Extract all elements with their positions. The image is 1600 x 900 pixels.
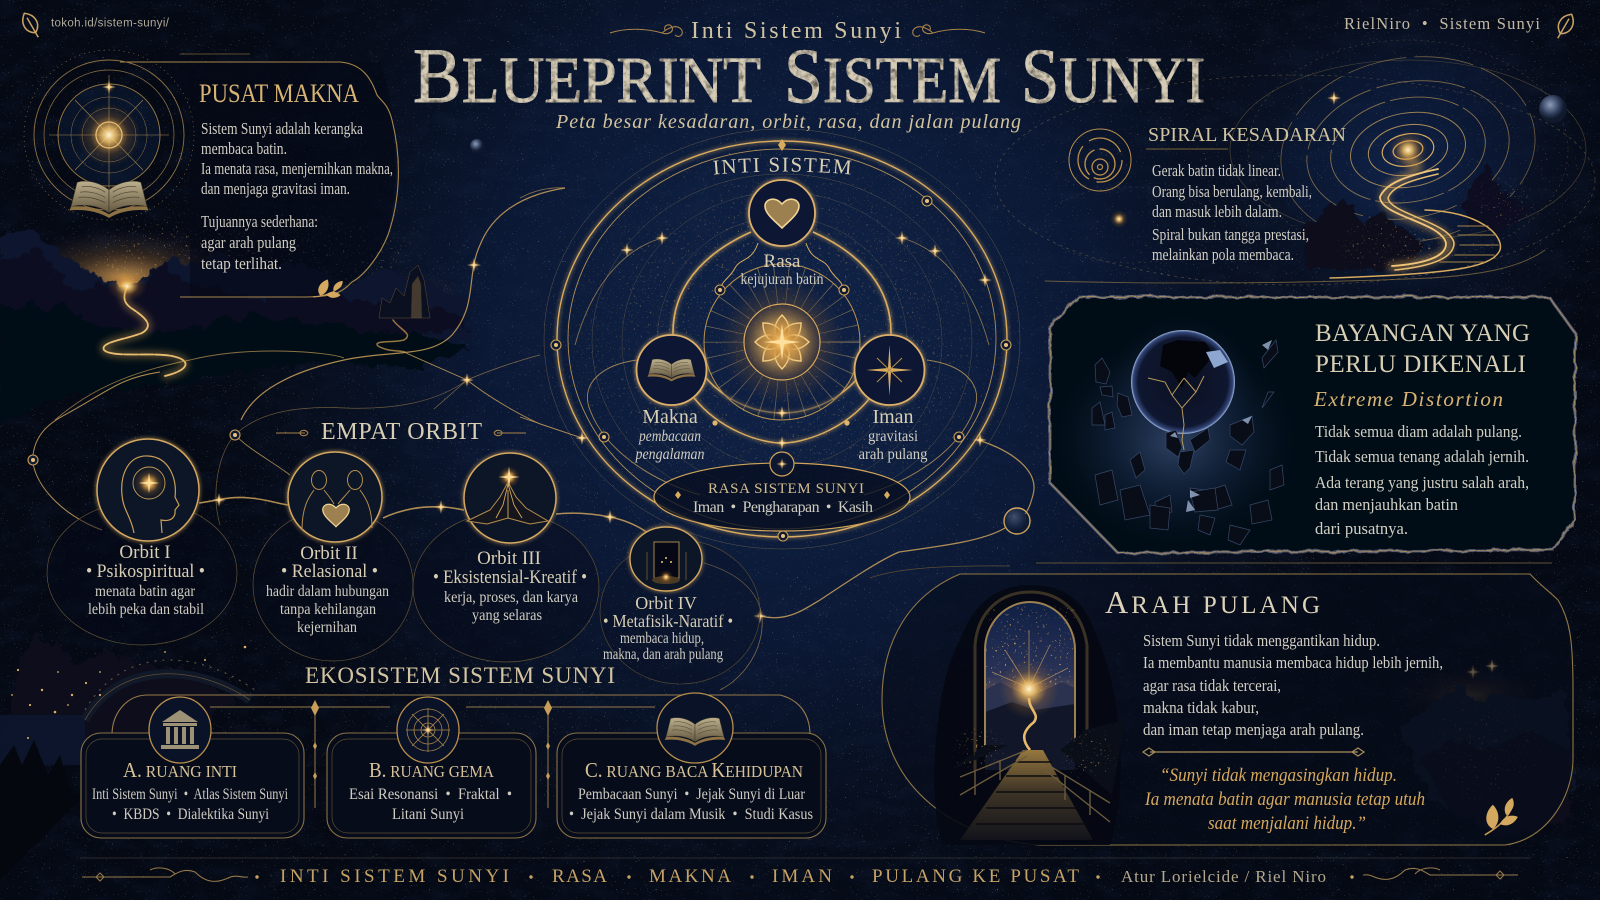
- heading: BAYANGAN YANG: [1315, 320, 1530, 347]
- orbit IV: Orbit IV: [635, 593, 697, 613]
- body text: agar rasa tidak tercerai,: [1143, 676, 1281, 695]
- quote: [1144, 765, 1425, 834]
- header: [19, 10, 1577, 133]
- orbit IV: membaca hidup,: [620, 630, 704, 647]
- footer keywords: RASA: [552, 866, 607, 887]
- icon: open book: [657, 693, 733, 763]
- eyebrow: Inti Sistem Sunyi: [691, 18, 901, 44]
- node: rasa: [740, 180, 824, 288]
- icon: laurel: [1482, 793, 1522, 842]
- body text: Ada terang yang justru salah arah,: [1315, 473, 1529, 492]
- title: [413, 32, 1205, 119]
- callout: rasa sistem sunyi: [654, 452, 910, 531]
- orbit I: lebih peka dan stabil: [88, 601, 204, 618]
- card B: ruang gema: B. RUANG GEMA: [369, 758, 495, 782]
- subtitle: Peta besar kesadaran, orbit, rasa, dan jalan pulang: [555, 111, 1021, 133]
- shattered sphere scene: [1053, 315, 1297, 545]
- node: makna: Makna: [642, 406, 698, 428]
- orbit IV: makna, dan arah pulang: [603, 646, 723, 663]
- flourish right: [913, 25, 985, 36]
- node: makna: pengalaman: [635, 446, 704, 463]
- body text: Tujuannya sederhana:: [201, 212, 318, 231]
- orbit III: • Eksistensial-Kreatif •: [433, 567, 587, 588]
- card A: ruang inti: [81, 697, 304, 838]
- card A: ruang inti: A. RUANG INTI: [123, 758, 237, 782]
- heading: EKOSISTEM SISTEM SUNYI: [305, 663, 615, 688]
- title: SISTEM: [784, 32, 1001, 119]
- body text: Sistem Sunyi tidak menggantikan hidup.: [1143, 631, 1380, 650]
- divider: [1146, 148, 1228, 150]
- panel frame: [1050, 297, 1575, 553]
- node: makna: pembacaan: [638, 428, 701, 445]
- body text: Tidak semua diam adalah pulang.: [1315, 422, 1522, 441]
- orbit II: Orbit II: [300, 543, 358, 564]
- orbit III: [413, 453, 599, 662]
- diagram: inti sistem: [520, 128, 1031, 550]
- card A: ruang inti: Inti Sistem Sunyi • Atlas Sistem Sunyi: [92, 786, 288, 803]
- node: iman: gravitasi: [868, 428, 919, 445]
- title: SUNYI: [1021, 32, 1205, 119]
- body text: membaca batin.: [201, 139, 287, 158]
- orbit III: kerja, proses, dan karya: [444, 589, 578, 606]
- footer keywords: Atur Lorielcide / Riel Niro: [1121, 867, 1326, 886]
- body text: Ia menata rasa, menjernihkan makna,: [201, 159, 393, 178]
- mandala center: [704, 264, 860, 420]
- card A: ruang inti: • KBDS • Dialektika Sunyi: [112, 806, 269, 823]
- river left: [104, 287, 407, 376]
- body text: Sistem Sunyi adalah kerangka: [201, 119, 363, 138]
- body text: dari pusatnya.: [1315, 519, 1408, 538]
- orbit I: menata batin agar: [95, 583, 196, 600]
- node: iman: Iman: [872, 406, 914, 428]
- body text: [201, 119, 393, 273]
- icon: spiral: [1069, 129, 1131, 191]
- icon: cosmic emblem with book: [24, 50, 194, 220]
- orbit II: • Relasional •: [281, 561, 378, 582]
- body text: dan menjaga gravitasi iman.: [201, 179, 350, 198]
- footer: [80, 858, 1530, 887]
- footer keywords: INTI SISTEM SUNYI: [280, 866, 509, 887]
- body text: Orang bisa berulang, kembali,: [1152, 182, 1312, 201]
- icon: head: [122, 456, 179, 533]
- castle silhouette: [379, 265, 430, 318]
- orbit II: [253, 452, 413, 661]
- body text: [1152, 161, 1312, 264]
- scene: left landscape with mountains and river: [0, 205, 470, 420]
- heading: PUSAT MAKNA: [199, 79, 359, 108]
- planet connector: [1004, 508, 1030, 534]
- heading: SPIRAL KESADARAN: [1148, 124, 1346, 146]
- node: iman: [854, 335, 928, 463]
- flourish left: [610, 25, 682, 36]
- body text: makna tidak kabur,: [1143, 698, 1259, 717]
- orbit III: Orbit III: [477, 548, 541, 569]
- body text: [1315, 422, 1529, 538]
- panel: bayangan yang perlu dikenali: PERLU DIKENALI: [1315, 351, 1526, 378]
- body text: Spiral bukan tangga prestasi,: [1152, 225, 1309, 244]
- icon: two figures with heart: [302, 470, 372, 530]
- icon: door: [647, 542, 686, 584]
- scene: archway with road: [934, 585, 1125, 845]
- icon: compass web: [397, 697, 459, 763]
- body text: agar arah pulang: [201, 233, 296, 252]
- card C: ruang baca kehidupan: [557, 693, 826, 838]
- body text: dan iman tetap menjaga arah pulang.: [1143, 720, 1364, 739]
- panel: arah pulang: [870, 566, 1573, 845]
- orbit I: [47, 439, 237, 645]
- flourish left: [82, 868, 248, 881]
- card B: ruang gema: Litani Sunyi: [392, 806, 464, 823]
- node: rasa: kejujuran batin: [740, 271, 824, 288]
- heading: empat orbit: EMPAT ORBIT: [321, 419, 482, 445]
- icon: mountain with star: [467, 466, 548, 524]
- body text: Ia membantu manusia membaca hidup lebih jernih,: [1143, 653, 1443, 672]
- small planet: [470, 139, 484, 153]
- planet: [1539, 95, 1567, 123]
- card C: ruang baca kehidupan: C. RUANG BACA KEHIDUPAN: [585, 758, 803, 782]
- scene: bottom-left bridge and town: [0, 630, 255, 880]
- card C: ruang baca kehidupan: Pembacaan Sunyi • Jejak Sunyi di Luar: [578, 786, 806, 803]
- icon: temple: [149, 697, 211, 763]
- body text: melainkan pola membaca.: [1152, 245, 1294, 264]
- body text: Tidak semua tenang adalah jernih.: [1315, 447, 1529, 466]
- callout: rasa sistem sunyi: RASA SISTEM SUNYI: [708, 481, 864, 497]
- card C: ruang baca kehidupan: • Jejak Sunyi dalam Musik • Studi Kasus: [569, 806, 813, 823]
- heading: ARAH PULANG: [1105, 584, 1320, 620]
- mountains under spiral: [1300, 198, 1425, 270]
- icon: leaf left: [19, 10, 44, 41]
- panel frame: [882, 574, 1573, 845]
- section: ekosistem sistem sunyi: [81, 663, 826, 838]
- spiral galaxy: [995, 37, 1595, 285]
- subheading: Extreme Distortion: [1313, 387, 1503, 411]
- body text: dan masuk lebih dalam.: [1152, 202, 1282, 221]
- source url: tokoh.id/sistem-sunyi/: [51, 18, 170, 30]
- panel: pusat makna: [24, 50, 398, 310]
- footer keywords: PULANG KE PUSAT: [872, 866, 1079, 887]
- body text: Gerak batin tidak linear.: [1152, 161, 1281, 180]
- body text: tetap terlihat.: [201, 254, 282, 273]
- brand right: RielNiro • Sistem Sunyi: [1344, 14, 1540, 33]
- quote: Ia menata batin agar manusia tetap utuh: [1144, 789, 1425, 810]
- orbit II: tanpa kehilangan: [280, 601, 376, 618]
- footer keywords: [255, 866, 1354, 887]
- panel: bayangan yang perlu dikenali: [1036, 297, 1575, 563]
- icon: leaf right: [1552, 11, 1577, 42]
- card B: ruang gema: [327, 697, 536, 838]
- orbit II: hadir dalam hubungan: [266, 583, 389, 600]
- card B: ruang gema: Esai Resonansi • Fraktal •: [349, 786, 512, 803]
- scene: right landscape inside arah pulang: [1390, 659, 1575, 838]
- node: makna: [635, 335, 706, 463]
- orbit III: yang selaras: [472, 607, 542, 624]
- body text: [1143, 631, 1443, 739]
- orbit I: • Psikospiritual •: [86, 561, 205, 582]
- flourish right: [1363, 868, 1518, 879]
- heading: empat orbit: [276, 419, 526, 445]
- orbit IV: [600, 527, 760, 684]
- panel: spiral kesadaran: [995, 37, 1595, 285]
- node: rasa: Rasa: [764, 251, 801, 272]
- ring nodes and sparks: [551, 139, 1011, 541]
- connecting orbit lines: [33, 188, 1034, 690]
- orbit I: Orbit I: [119, 542, 171, 563]
- connector nodes: [28, 258, 767, 623]
- golden road: [1045, 160, 1545, 283]
- body text: dan menjauhkan batin: [1315, 495, 1458, 514]
- quote: saat menjalani hidup.”: [1208, 813, 1366, 834]
- orbit II: kejernihan: [297, 619, 357, 636]
- quote: “Sunyi tidak mengasingkan hidup.: [1160, 765, 1397, 786]
- divider: [1143, 748, 1364, 756]
- heading: INTI SISTEM: [713, 158, 852, 174]
- title: BLUEPRINT: [413, 32, 761, 119]
- orbit rings: [520, 129, 1020, 549]
- footer keywords: MAKNA: [649, 866, 731, 887]
- icon: laurel: [311, 271, 348, 310]
- connector rails: [112, 695, 810, 808]
- orbit IV: • Metafisik-Naratif •: [603, 611, 733, 631]
- callout: rasa sistem sunyi: Iman • Pengharapan • Kasih: [693, 499, 873, 516]
- node: iman: arah pulang: [858, 446, 928, 463]
- footer keywords: IMAN: [772, 866, 832, 887]
